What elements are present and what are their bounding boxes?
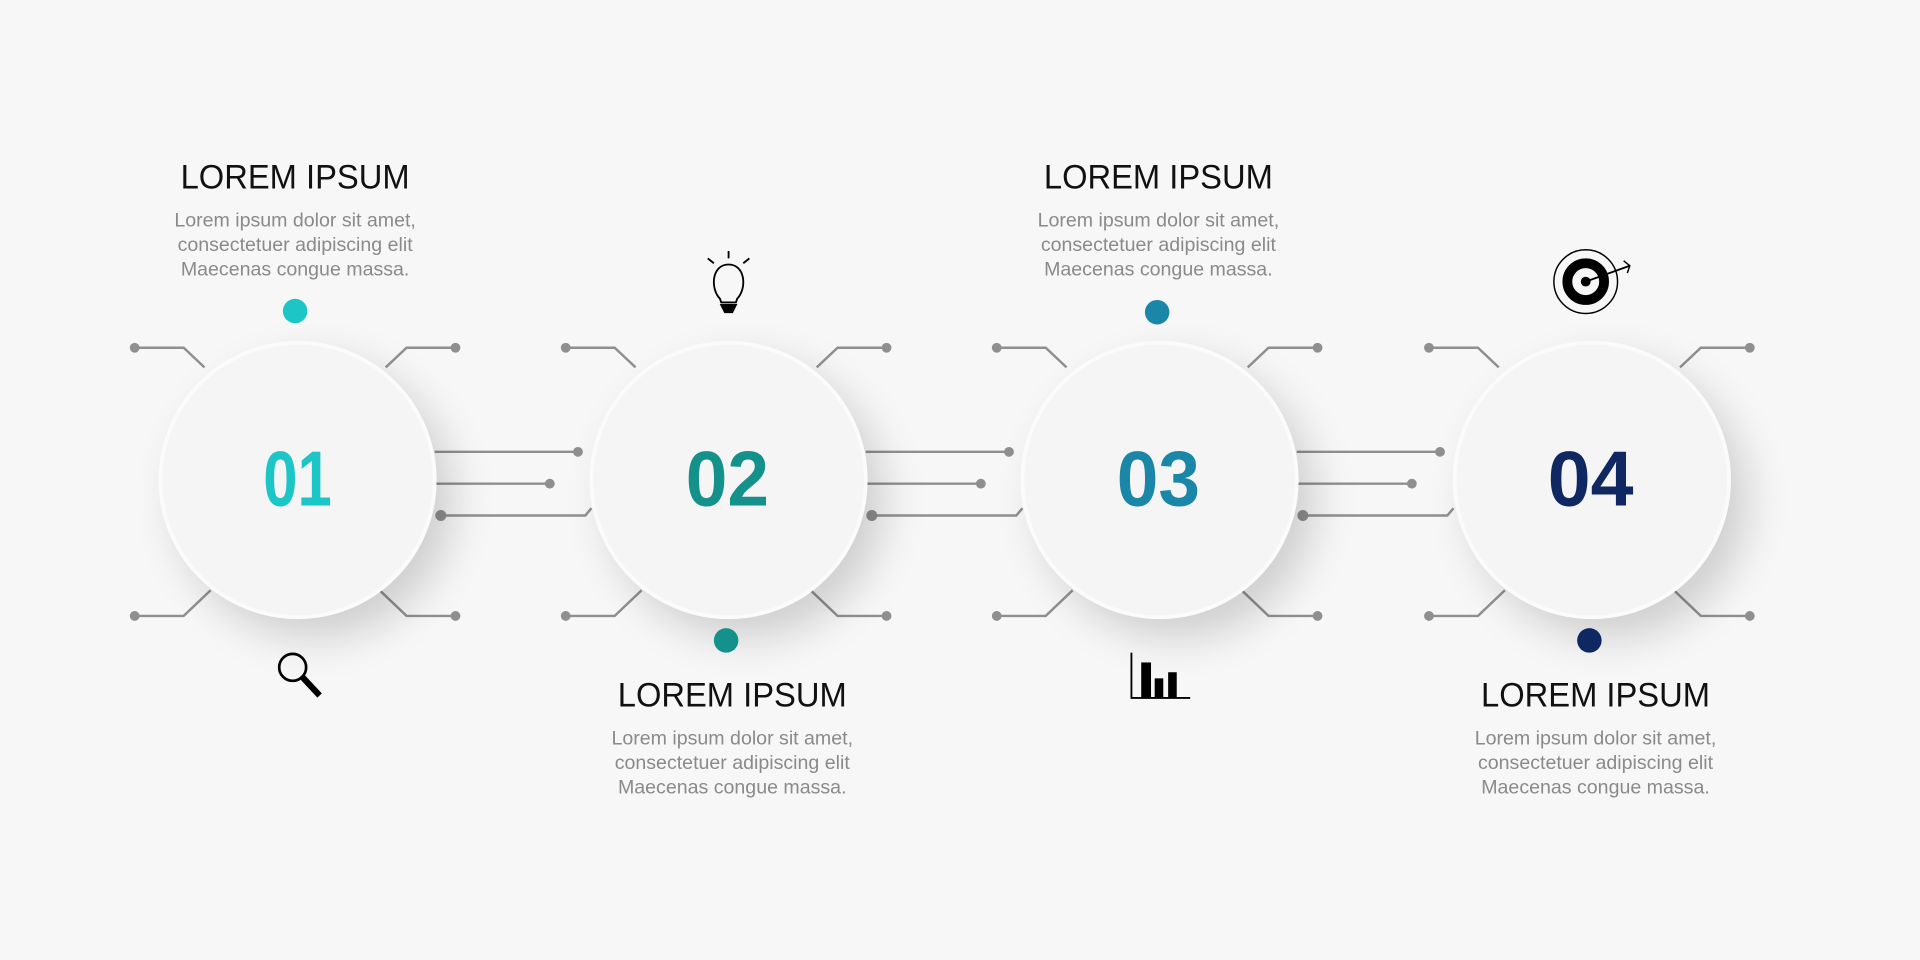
title 3: LOREM IPSUM — [1044, 159, 1273, 197]
dot 3 — [1145, 300, 1169, 324]
circle 01: 01 — [263, 435, 332, 523]
circuit lines 1 — [130, 343, 591, 621]
dot 2 — [714, 628, 738, 653]
text 3: consectetuer adipiscing elit — [1041, 234, 1276, 256]
text 2 — [611, 727, 853, 798]
text 2: Lorem ipsum dolor sit amet, — [611, 727, 853, 749]
circle 01 — [160, 343, 435, 617]
step 3 — [992, 159, 1453, 698]
circle 03 — [1022, 343, 1297, 617]
step 2 — [561, 251, 1022, 798]
circuit lines 3 — [992, 343, 1453, 621]
dot 1 — [283, 299, 307, 323]
circle 04: 04 — [1548, 435, 1634, 523]
step 4 — [1424, 250, 1755, 798]
circuit lines 2 — [561, 343, 1022, 621]
text 1 — [174, 210, 416, 281]
icon: magnifier — [279, 654, 320, 696]
text 3: Maecenas congue massa. — [1044, 259, 1273, 281]
circuit lines 4 — [1424, 343, 1755, 621]
text 3: Lorem ipsum dolor sit amet, — [1038, 210, 1279, 232]
title 4: LOREM IPSUM — [1481, 677, 1710, 715]
circle 03: 03 — [1117, 435, 1200, 523]
text 1: Maecenas congue massa. — [181, 259, 409, 281]
icon: target — [1554, 250, 1630, 313]
circle 02 — [591, 343, 866, 617]
text 4: Maecenas congue massa. — [1481, 776, 1710, 798]
step 1 — [130, 159, 591, 696]
dot 4 — [1577, 628, 1602, 653]
text 3 — [1038, 210, 1279, 281]
text 4 — [1475, 727, 1716, 798]
text 4: consectetuer adipiscing elit — [1478, 752, 1714, 774]
icon: bulb — [708, 251, 749, 312]
circle 02: 02 — [686, 435, 769, 523]
title 1: LOREM IPSUM — [181, 159, 410, 197]
title 2: LOREM IPSUM — [618, 677, 847, 715]
text 1: consectetuer adipiscing elit — [178, 234, 413, 256]
text 1: Lorem ipsum dolor sit amet, — [174, 210, 416, 232]
icon: bar chart — [1131, 653, 1190, 698]
text 4: Lorem ipsum dolor sit amet, — [1475, 727, 1716, 749]
circle 04 — [1455, 343, 1729, 617]
text 2: Maecenas congue massa. — [618, 776, 847, 798]
text 2: consectetuer adipiscing elit — [615, 752, 850, 774]
